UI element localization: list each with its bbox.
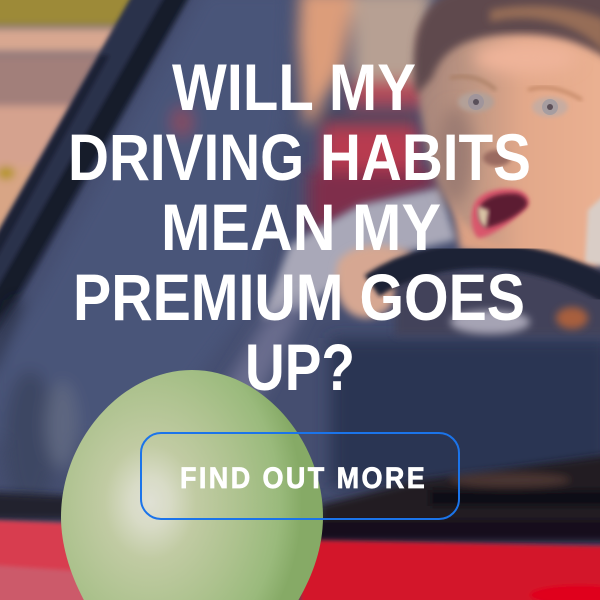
hair [414,0,600,95]
headline: UP? [245,330,355,404]
left eye [458,92,494,112]
headline: MEAN MY [161,190,441,264]
hand on wheel [336,245,412,318]
right eyebrow [528,88,582,100]
forehead [473,42,577,74]
call to action button [141,433,459,519]
steering wheel [372,256,600,336]
blue-grey door panel [0,0,290,510]
call to action button: FIND OUT MORE [180,462,425,495]
headline [68,50,531,404]
hair highlight [490,6,600,55]
right eye [532,97,568,117]
mouth [472,189,529,238]
nose [483,150,511,166]
balloon [61,370,323,600]
window pillar [0,0,195,345]
dark dash shadow strip [0,455,600,542]
driver head [414,0,600,262]
headline: PREMIUM GOES [73,260,525,334]
headline: DRIVING HABITS [68,120,531,194]
red and orange blurred interior [298,0,440,236]
driver shirt [262,188,456,320]
right edge shirt collar [585,190,600,268]
driver arm [205,295,310,440]
window scenery bands [0,0,160,244]
shaded cheek [437,107,473,203]
navy lower dashboard [330,338,600,488]
left eyebrow [450,76,496,90]
driver neck [450,190,600,270]
headline: WILL MY [172,50,416,124]
red car body [0,520,600,600]
